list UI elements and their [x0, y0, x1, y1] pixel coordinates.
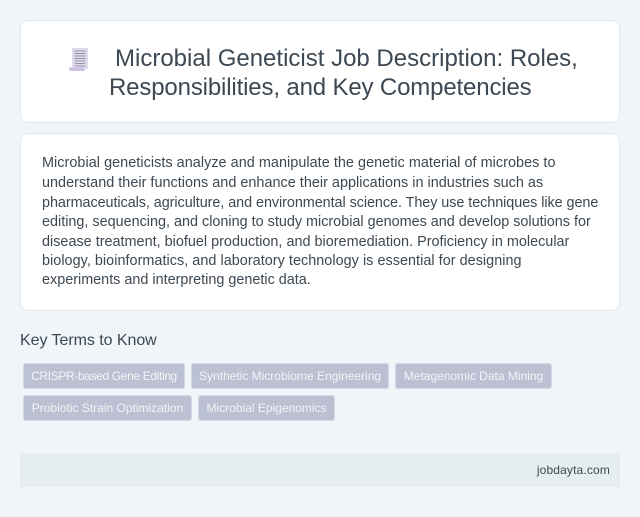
panel: title card [20, 20, 620, 123]
tag: Synthetic Microbiome Engineering [199, 369, 381, 383]
title line 2: Responsibilities, and Key Competencies [109, 74, 532, 101]
description text: understand their functions and enhance their applications in industries such as [42, 175, 543, 191]
tag: CRISPR-based Gene Editing [31, 369, 177, 383]
description text [42, 155, 598, 288]
tag: Probiotic Strain Optimization [32, 401, 183, 415]
description text: Microbial geneticists analyze and manipulate the genetic material of microbes to [42, 155, 556, 171]
panel: description [20, 133, 620, 311]
description text: disease treatment, biofuel production, and bioremediation. Proficiency in molecular [42, 234, 569, 250]
tag [23, 395, 192, 421]
tag [198, 395, 335, 421]
tag: Microbial Epigenomics [206, 401, 327, 415]
heading: key terms: Key Terms to Know [20, 332, 157, 349]
description text: biology, bioinformatics, and laboratory technology is essential for designing [42, 253, 522, 269]
footer text: jobdayta.com [537, 463, 610, 477]
description text: editing, sequencing, and cloning to study microbial genomes and develop solutions for [42, 214, 591, 230]
title line 1: Microbial Geneticist Job Description: Roles, [115, 45, 578, 72]
description text: experiments and interpreting genetic data. [42, 272, 311, 288]
footer bar [20, 453, 620, 487]
tag [23, 363, 185, 389]
tag [191, 363, 389, 389]
tag: Metagenomic Data Mining [404, 369, 543, 383]
tags: key terms [23, 363, 552, 421]
tag [395, 363, 552, 389]
icon: document scroll [69, 48, 88, 71]
description text: pharmaceuticals, agriculture, and environmental science. They use techniques like gene [42, 195, 598, 211]
